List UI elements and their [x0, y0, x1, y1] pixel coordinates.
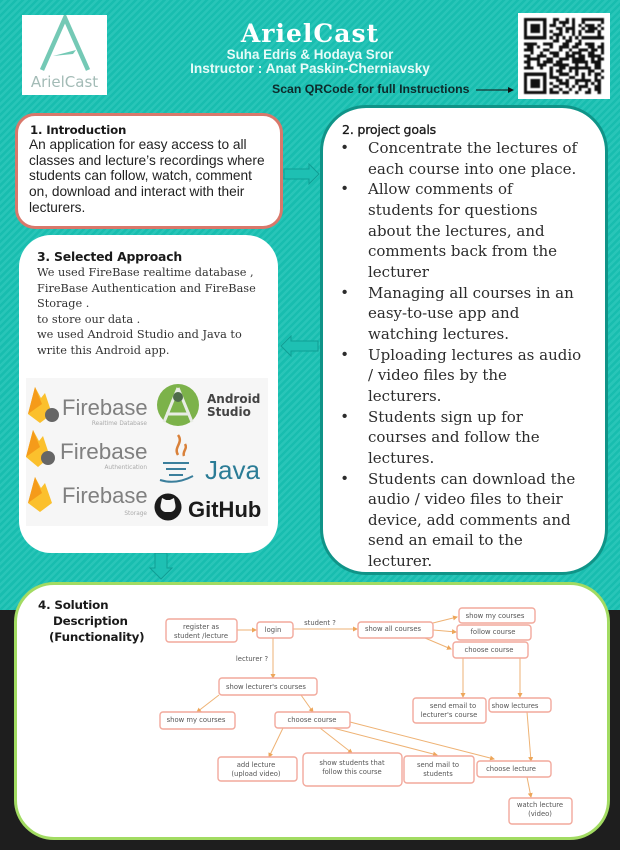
list: goals: • [342, 346, 347, 363]
flow labels: send email to [430, 702, 476, 710]
panel: project goals [320, 105, 608, 575]
QR code [518, 13, 610, 99]
heading: solution description: 4. Solution [38, 598, 108, 612]
list: goals: lectures. [368, 449, 434, 467]
list: goals [342, 139, 581, 570]
list: goals: • [342, 408, 347, 425]
list: goals: lecturers. [368, 387, 441, 405]
flow labels: add lecture [237, 761, 275, 769]
flow labels: lecturer's course [421, 711, 477, 719]
list: goals: device, add comments and [368, 511, 571, 529]
logo: android studio [157, 384, 260, 426]
list: goals: Students sign up for [368, 408, 523, 426]
logo: android studio: Studio [207, 405, 251, 419]
flow boxes [160, 608, 572, 824]
arrow: approach to solution [149, 553, 173, 580]
list: goals: Students can download the [368, 470, 575, 488]
flow labels: lecturer ? [236, 655, 268, 663]
panel: introduction [15, 113, 283, 229]
list: goals: lecturer [368, 263, 429, 281]
logo: firebase realtime database: Firebase [60, 439, 148, 464]
list: goals: Allow comments of [368, 180, 513, 198]
panel: selected approach [19, 235, 278, 553]
logo: java [160, 434, 260, 484]
list: goals: each course into one place. [368, 160, 576, 178]
arrow: goals to approach [280, 335, 318, 357]
list: goals: Concentrate the lectures of [368, 139, 577, 157]
flow labels: show all courses [365, 625, 422, 633]
flow labels: show my courses [167, 716, 226, 724]
list: goals: / video files by the [368, 366, 507, 384]
logo: firebase realtime database [26, 387, 148, 517]
list: goals: • [342, 139, 347, 156]
technology logos [26, 378, 268, 526]
flow labels: students [423, 770, 453, 778]
flow labels: show lectures [492, 702, 539, 710]
flow labels: follow course [471, 628, 515, 636]
title: ArielCast [241, 19, 379, 48]
logo: firebase realtime database: Storage [124, 511, 147, 517]
logo: firebase realtime database: Firebase [62, 483, 148, 508]
arrow: introduction to goals [284, 163, 320, 185]
list: goals: students for questions [368, 201, 538, 219]
heading: solution description: Description [53, 614, 128, 628]
list: goals: Uploading lectures as audio [368, 346, 581, 364]
logo: ArielCast [31, 73, 98, 91]
heading: introduction: 1. Introduction [30, 123, 126, 137]
list: goals: audio / video files to their [368, 490, 563, 508]
heading: selected approach: 3. Selected Approach [37, 249, 182, 264]
heading: solution description: (Functionality) [49, 630, 144, 644]
logo: firebase realtime database: Authentication [104, 465, 147, 471]
flow labels: register as [183, 623, 219, 631]
logo: firebase realtime database: Realtime Database [92, 421, 147, 427]
flow labels: show my courses [466, 612, 525, 620]
heading: solution description [38, 598, 144, 644]
flow labels: show lecturer's courses [226, 683, 306, 691]
text: introduction: classes and lecture’s recordings where [29, 153, 265, 168]
list: goals: Managing all courses in an [368, 284, 574, 302]
flow labels: student ? [304, 619, 336, 627]
text: introduction: students can follow, watch, comment [29, 168, 252, 183]
flow labels: follow this course [322, 768, 382, 776]
list: goals: comments back from the [368, 242, 557, 260]
text: selected approach [37, 266, 256, 357]
list: goals: • [342, 284, 347, 301]
list: goals: • [342, 470, 347, 486]
list: goals: easy-to-use app and [368, 304, 519, 322]
list: goals: watching lectures. [368, 325, 509, 343]
text: introduction: An application for easy access to all [29, 137, 247, 152]
flow labels [167, 612, 563, 818]
logo: github: GitHub [188, 497, 261, 522]
instructor: Instructor : Anat Paskin-Cherniavsky [190, 61, 430, 76]
panel: solution description [14, 582, 610, 840]
flow labels: choose course [288, 716, 336, 724]
flow labels: choose course [465, 646, 513, 654]
flow labels: choose lecture [486, 765, 536, 773]
logo: firebase realtime database: Firebase [62, 395, 148, 420]
text: selected approach: Storage . [37, 297, 89, 310]
flow labels: show students that [319, 759, 385, 767]
text: selected approach: we used Android Studio and Java to [37, 328, 242, 341]
flow labels: student /lecture [174, 632, 228, 640]
QR instruction: Scan QRCode for full Instructions [272, 82, 469, 96]
text: selected approach: FireBase Authentication and FireBase [37, 282, 256, 295]
text: selected approach: We used FireBase realtime database , [37, 266, 254, 279]
flow labels: watch lecture [517, 801, 563, 809]
list: goals: about the lectures, and [368, 222, 545, 240]
list: goals: courses and follow the [368, 428, 540, 446]
text: introduction: lecturers. [29, 200, 85, 215]
text: introduction [29, 137, 265, 215]
logo: github [154, 494, 261, 522]
text: introduction: on, download and interact with their [29, 184, 244, 199]
flow labels: (video) [528, 810, 552, 818]
heading: project goals: 2. project goals [342, 122, 436, 137]
authors: Suha Edris & Hodaya Sror [227, 47, 393, 62]
flow labels: (upload video) [231, 770, 281, 778]
text: selected approach: write this Android app. [37, 344, 169, 357]
flow labels: send mail to [417, 761, 459, 769]
logo: android studio: Android [207, 392, 260, 406]
list: goals: send an email to the [368, 531, 523, 549]
list: goals: • [342, 180, 347, 197]
flow arrows [197, 617, 531, 797]
flow labels: login [265, 626, 281, 634]
list: goals: lecturer. [368, 552, 432, 570]
text: selected approach: to store our data . [37, 313, 140, 326]
logo [22, 15, 107, 95]
